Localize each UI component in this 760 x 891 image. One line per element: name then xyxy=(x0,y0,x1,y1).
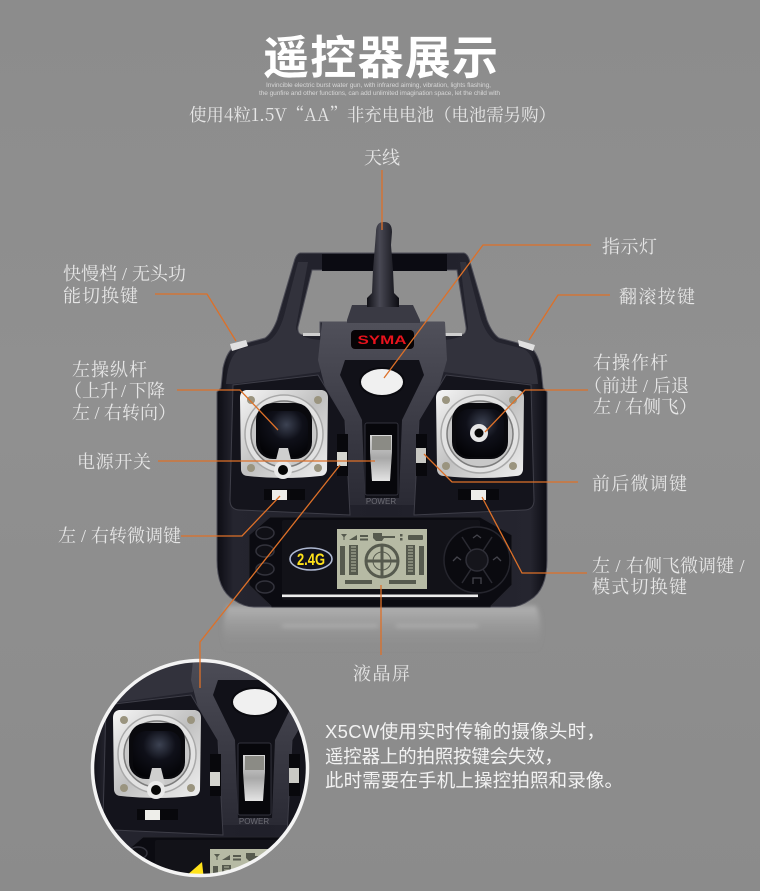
label: left/right turn trim: 左 / 右转微调键 xyxy=(58,526,181,546)
power label on controller: POWER xyxy=(366,497,396,506)
horizontal trim sliders xyxy=(264,489,305,500)
label: speed / headless switch xyxy=(63,264,186,306)
label: side-fly trim and mode switch xyxy=(592,556,745,597)
syma logo xyxy=(351,330,414,349)
antenna xyxy=(367,222,399,307)
d-pad xyxy=(444,527,510,593)
power switch xyxy=(365,423,398,495)
label: side-fly trim and mode switch: 模式切换键 xyxy=(592,577,687,597)
shoulder surfaces xyxy=(226,262,320,384)
zoomed camera-key detail circle: POWER xyxy=(239,817,269,826)
small english caption xyxy=(259,82,500,97)
vertical trim sliders xyxy=(337,434,348,476)
remote controller xyxy=(217,222,547,607)
label: right stick: 左/右侧飞） xyxy=(593,397,697,417)
syma logo: SYMA xyxy=(358,333,407,347)
small english caption: Invincible electric burst water gun, with infrared aiming, vibration, lights flashing, xyxy=(266,82,491,89)
note: X5CW camera text: X5CW使用实时传输的摄像头时， xyxy=(325,721,605,742)
left side buttons xyxy=(256,527,274,593)
right stick xyxy=(436,390,524,478)
label: right stick: 右操作杆 xyxy=(593,353,668,373)
label: lcd screen: 液晶屏 xyxy=(353,664,410,684)
controller body and handle xyxy=(217,253,547,607)
stick recess panels xyxy=(230,375,350,515)
label: right stick: （前进 / 后退 xyxy=(584,376,689,396)
note: X5CW camera text: 此时需要在手机上操控拍照和录像。 xyxy=(325,770,623,791)
2.4G badge xyxy=(290,548,332,570)
indicator light xyxy=(360,368,404,396)
label: indicator light: 指示灯 xyxy=(602,237,657,257)
console inner dark area xyxy=(340,360,424,498)
title: 遥控器展示 xyxy=(263,32,498,84)
shoulder highlights xyxy=(303,333,462,336)
zoomed camera-key detail circle xyxy=(90,658,310,878)
label: side-fly trim and mode switch: 左 / 右侧飞微调键 / xyxy=(592,556,745,576)
label: flip button: 翻滚按键 xyxy=(619,287,695,307)
small english caption: the gunfire and other functions, can add unlimited imagination space, let the child with xyxy=(259,90,500,97)
2.4G badge: 2.4G xyxy=(297,550,325,569)
label: speed / headless switch: 能切换键 xyxy=(63,286,138,306)
label: left stick: 左/右转向） xyxy=(72,403,176,423)
label: power switch: 电源开关 xyxy=(77,452,151,472)
label: left stick xyxy=(64,360,176,423)
leader lines xyxy=(155,170,610,688)
label: left stick: 左操纵杆 xyxy=(72,360,147,380)
label: speed / headless switch: 快慢档 / 无头功 xyxy=(63,264,186,284)
label: left stick: （上升/下降 xyxy=(64,381,165,401)
lower screen panel xyxy=(249,517,512,607)
note: X5CW camera text: 遥控器上的拍照按键会失效， xyxy=(325,746,563,767)
label: right stick xyxy=(584,353,697,417)
white strip under screen xyxy=(282,594,478,597)
controller reflection xyxy=(223,606,541,650)
label: forward/back trim: 前后微调键 xyxy=(592,474,687,494)
subtitle: battery note: 使用4粒1.5V“AA”非充电电池（电池需另购） xyxy=(189,102,556,127)
lcd screen xyxy=(337,529,427,589)
central console xyxy=(318,322,447,505)
left stick xyxy=(240,390,328,479)
label: antenna: 天线 xyxy=(364,148,400,168)
note: X5CW camera text xyxy=(325,721,623,791)
